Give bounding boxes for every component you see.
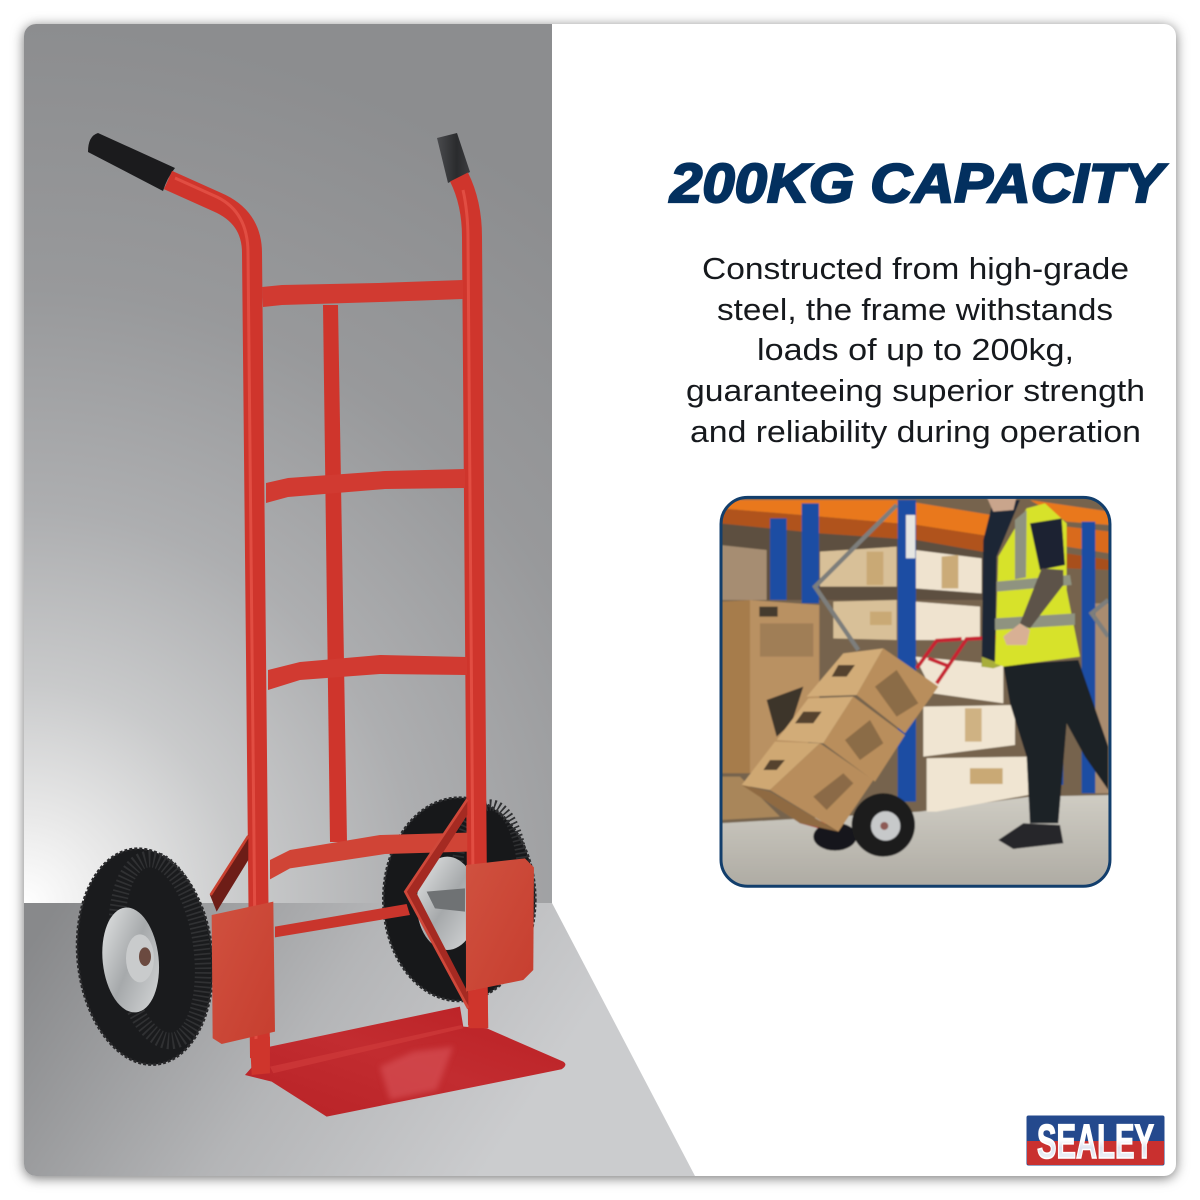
wrapped pallet <box>720 545 767 600</box>
blue uprights <box>770 500 1095 802</box>
footplate <box>245 1007 565 1117</box>
left tube foot <box>250 1037 270 1075</box>
cross bar 4 <box>270 833 467 879</box>
description text <box>686 251 1145 449</box>
cross bar 1 <box>262 280 463 307</box>
sack truck product image <box>67 133 565 1117</box>
cross rod <box>275 904 410 937</box>
cardboard boxes <box>742 648 938 832</box>
orange beams <box>720 500 1110 570</box>
footplate highlight <box>380 1047 453 1100</box>
left brace <box>210 835 248 912</box>
front wheel <box>852 793 915 857</box>
icon: front wheel <box>67 842 223 1071</box>
trolley base <box>801 820 826 830</box>
description text: and reliability during operation <box>690 414 1141 449</box>
right frame tube <box>459 177 478 1025</box>
floor <box>720 795 1112 887</box>
cross bar 2 <box>266 469 465 503</box>
icon: right handle grip <box>437 133 470 183</box>
footplate bend shading <box>270 1025 463 1073</box>
left frame tube <box>168 180 260 1058</box>
wooden crates lower <box>867 552 1028 812</box>
tube highlights <box>175 178 474 1040</box>
panel: product backdrop <box>24 24 695 1176</box>
right brace <box>404 798 468 1010</box>
right wheel plate <box>466 858 534 992</box>
left wheel plate <box>212 902 275 1044</box>
description text: Constructed from high-grade <box>702 251 1129 286</box>
lower assembly <box>67 798 565 1117</box>
trolley frame <box>917 637 1003 683</box>
warehouse background <box>722 498 1108 824</box>
shelf label <box>906 515 915 558</box>
lifestyle photo: worker moving boxes in warehouse <box>720 497 1112 887</box>
wooden crates upper <box>820 547 982 640</box>
rear wheel <box>813 823 857 851</box>
central upright strap <box>323 305 347 842</box>
icon: left handle grip <box>88 133 175 191</box>
pallet left <box>720 777 780 820</box>
title: 200KG CAPACITY <box>669 152 1168 214</box>
description text: loads of up to 200kg, <box>757 332 1074 367</box>
far right pallet <box>1094 602 1108 794</box>
worker <box>982 497 1108 849</box>
machine box <box>720 600 819 773</box>
cross bar 3 <box>268 655 467 690</box>
grey braces <box>815 505 1108 650</box>
description text: guaranteeing superior strength <box>686 373 1145 408</box>
icon: rear wheel <box>383 798 535 1001</box>
right tube foot <box>468 990 488 1028</box>
photo border <box>721 497 1110 886</box>
description text: steel, the frame withstands <box>717 292 1113 327</box>
